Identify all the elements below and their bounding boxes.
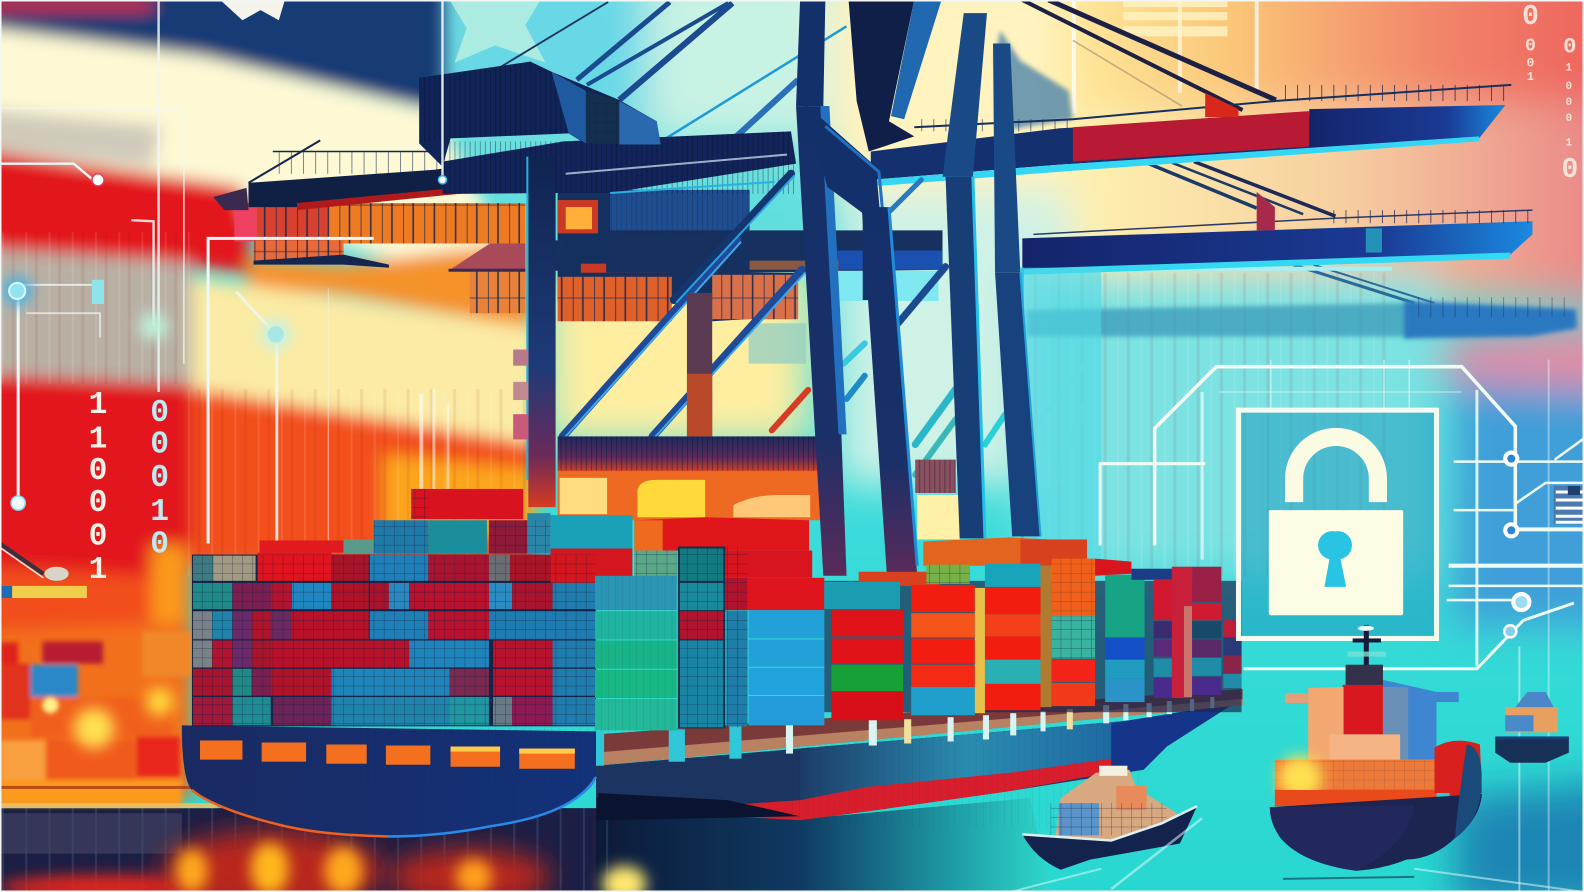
container stack: midship blocks	[595, 517, 824, 730]
cargo ship: hull windows	[200, 740, 575, 769]
background streaks	[0, 0, 1394, 576]
green and teal block	[595, 576, 677, 730]
binary digits column two: 0	[150, 428, 169, 463]
cargo ship: deck supports	[596, 689, 1243, 766]
crane: structures behind main beam	[558, 190, 943, 364]
binary digits top right	[1522, 1, 1578, 186]
binary digits column one: 0	[89, 454, 107, 489]
top tier containers	[260, 489, 632, 583]
upper red tier	[634, 517, 824, 610]
crane: left boom with lattice	[213, 140, 525, 268]
row 3	[193, 611, 595, 639]
crane: far boom	[1020, 267, 1577, 338]
binary digits top right: 0	[1566, 97, 1573, 109]
quay buildings and lights bottom left	[0, 631, 647, 892]
far lattice structure at right of crane	[995, 30, 1073, 129]
distant ship	[1495, 692, 1569, 763]
mast	[1348, 625, 1386, 666]
binary digits top right: 0	[1566, 113, 1573, 125]
row 4	[193, 640, 595, 668]
binary digits top right: 0	[1522, 1, 1539, 33]
reflections in dark water	[0, 808, 647, 892]
binary digits top right: 0	[1566, 81, 1573, 93]
cargo ship: stern hull	[182, 725, 596, 836]
crane: main beam	[442, 131, 796, 271]
circuit nodes right	[1504, 453, 1529, 637]
binary digits top right: 1	[1566, 63, 1573, 75]
crane: middle boom	[1022, 192, 1532, 275]
binary digits column two: 0	[150, 528, 169, 563]
dark grid column	[678, 547, 748, 728]
binary digits column one	[89, 388, 107, 588]
document icon	[1554, 486, 1584, 524]
binary digits top right: 0	[1527, 56, 1535, 71]
container stack: aft grid	[192, 489, 632, 726]
flag stars	[220, 0, 546, 63]
row 1	[193, 553, 551, 581]
binary digits column two: 0	[150, 461, 169, 496]
binary digits column one: 0	[89, 486, 107, 521]
padlock panel	[1100, 360, 1584, 892]
crane: mid lattice deck	[449, 243, 525, 313]
quay crane at far left	[0, 543, 87, 598]
blue stack	[749, 610, 824, 725]
binary digits column one: 1	[89, 553, 107, 588]
binary digits top right: 0	[1525, 37, 1536, 57]
binary digits top right: 0	[1563, 35, 1577, 60]
binary digits top right: 1	[1566, 137, 1573, 149]
crane: lower portal beam and arches	[558, 268, 1101, 561]
binary digits column two	[150, 396, 169, 563]
left circuit lines and nodes	[0, 0, 447, 543]
binary digits column one: 1	[89, 388, 107, 423]
crane: cabin	[419, 62, 661, 167]
water wake streaks	[1010, 818, 1584, 892]
crane: diagonal braces	[563, 174, 1086, 505]
binary digits top right: 0	[1561, 154, 1578, 186]
row 6	[193, 697, 595, 725]
padlock shackle	[1294, 437, 1378, 502]
small stacked containers behind column	[513, 350, 528, 439]
binary digits column two: 1	[150, 495, 169, 530]
keyhole	[1318, 531, 1352, 587]
crane: cables	[501, 0, 1434, 303]
binary digits column one: 1	[89, 423, 107, 458]
row 2	[193, 583, 595, 609]
crane: columns and legs	[526, 0, 1041, 576]
tug boat	[1022, 766, 1197, 870]
binary digits column one: 0	[89, 519, 107, 554]
binary digits column two: 0	[150, 396, 169, 431]
binary digits top right: 1	[1527, 70, 1534, 84]
padlock body	[1269, 510, 1403, 615]
ship right: container vessel front view	[1270, 625, 1482, 871]
row 5	[193, 669, 595, 696]
cargo ship: midship and bow hull	[596, 703, 1234, 828]
circuit frame around lock	[1100, 360, 1584, 892]
container stack: forward blocks	[824, 537, 1242, 720]
crane: upper boom	[871, 85, 1511, 186]
